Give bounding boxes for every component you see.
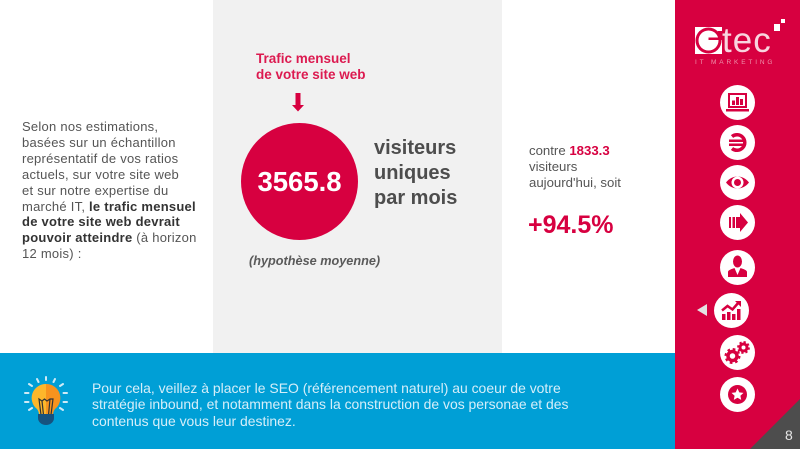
chart: main value circle — [241, 123, 358, 240]
arrow: down to circle — [292, 93, 304, 112]
nav icon: eye — [720, 165, 755, 200]
text block: estimation intro: et sur notre expertise du — [22, 183, 168, 198]
nav icon: gears — [720, 335, 755, 370]
nav icon: growth chart (active) — [714, 293, 749, 328]
text block: advice: Pour cela, veillez à placer le SEO (référencement naturel) au coeur de votre — [92, 380, 561, 396]
text block: visiteurs uniques par mois — [374, 137, 457, 209]
nav marker: active triangle — [697, 304, 707, 316]
nav icon: laptop chart — [720, 85, 755, 120]
text block: estimation intro: Selon nos estimations, — [22, 119, 158, 134]
text block: advice: contenus que vous leur destinez. — [92, 413, 296, 429]
chart: main value circle: 3565.8 — [257, 166, 342, 197]
logo mark: G square — [695, 27, 722, 54]
logo wordmark: tec — [722, 21, 772, 60]
panel: red sidebar — [675, 0, 800, 449]
text block: advice: stratégie inbound, et notamment dans la construction de vos personae et des — [92, 396, 568, 412]
text block: visiteurs uniques par mois: par mois — [374, 187, 457, 209]
text block: comparison — [529, 143, 621, 190]
logo: Gtec IT Marketing — [695, 19, 785, 66]
text block: advice — [92, 380, 568, 429]
text block: estimation intro: représentatif de vos ratios — [22, 151, 178, 166]
text block: comparison: aujourd'hui, soit — [529, 175, 621, 190]
page number: 8 — [785, 427, 793, 443]
text block: estimation intro: marché IT, le trafic mensuel — [22, 199, 196, 214]
text block: visiteurs uniques par mois: visiteurs — [374, 137, 456, 159]
nav icon: star badge — [720, 377, 755, 412]
text block: estimation intro: actuels, sur votre site web — [22, 167, 179, 182]
nav icon: euro — [720, 125, 755, 160]
text block: estimation intro — [22, 119, 197, 261]
icon: light bulb — [24, 376, 68, 425]
heading: trafic mensuel — [256, 51, 366, 82]
text block: estimation intro: 12 mois) : — [22, 246, 82, 261]
text block: comparison: contre 1833.3 — [529, 143, 610, 158]
nav icon: person — [720, 250, 755, 285]
text block: comparison: visiteurs — [529, 159, 577, 174]
text block: estimation intro: pouvoir atteindre (à horizon — [22, 230, 197, 245]
stat: growth percentage: +94.5% — [528, 211, 614, 239]
heading: trafic mensuel: Trafic mensuel — [256, 51, 351, 66]
text block: visiteurs uniques par mois: uniques — [374, 162, 451, 184]
caption: hypothese moyenne: (hypothèse moyenne) — [249, 254, 380, 268]
panel: centre grey background — [213, 0, 502, 353]
page corner: dark triangle — [750, 399, 800, 449]
logo tagline: IT MARKETING — [695, 59, 775, 66]
heading: trafic mensuel: de votre site web — [256, 67, 366, 82]
text block: estimation intro: basées sur un échantillon — [22, 135, 176, 150]
nav icon: arrow right — [720, 205, 755, 240]
panel: blue advice banner — [0, 353, 675, 449]
logo pixels — [774, 19, 785, 31]
text block: estimation intro: de votre site web devrait — [22, 214, 180, 229]
